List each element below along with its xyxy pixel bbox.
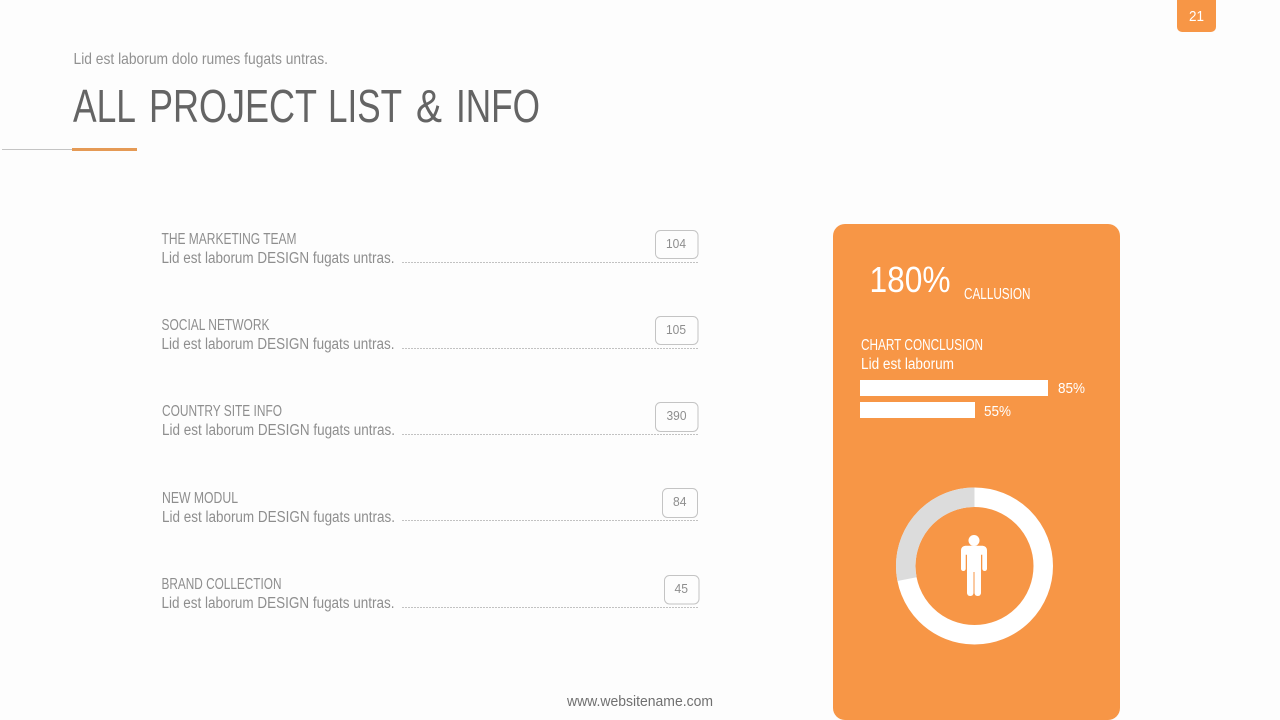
bar chart: 55% — [984, 403, 1011, 420]
title underline — [2, 148, 137, 151]
bar chart — [860, 380, 1085, 420]
donut chart — [906, 497, 1043, 635]
row: new modul: Lid est laborum DESIGN fugats untras. — [162, 509, 395, 526]
footer url: www.websitename.com — [566, 694, 713, 710]
title: INFO — [456, 80, 540, 132]
title: PROJECT — [149, 80, 317, 132]
page number tag: 21 — [1189, 8, 1204, 25]
row: country site info: 390 — [666, 408, 686, 423]
row: social network: SOCIAL NETWORK — [162, 317, 270, 334]
row: the marketing team: 104 — [666, 236, 686, 251]
row: country site info: Lid est laborum DESIGN fugats untras. — [162, 422, 395, 439]
page number tag — [1177, 0, 1216, 32]
row: social network: 105 — [666, 322, 686, 337]
row: brand collection: BRAND COLLECTION — [162, 576, 282, 593]
row: the marketing team — [162, 230, 699, 267]
row: brand collection: 45 — [674, 581, 688, 596]
row: new modul: 84 — [673, 494, 686, 509]
row: country site info: COUNTRY SITE INFO — [162, 403, 282, 420]
row: new modul: NEW MODUL — [162, 490, 238, 507]
title: LIST — [328, 80, 402, 132]
bar chart: 85% — [1058, 380, 1085, 397]
icon: person — [961, 535, 987, 596]
title — [73, 80, 540, 132]
panel: conclusion card — [833, 224, 1120, 720]
row: country site info — [162, 402, 699, 439]
title: & — [416, 80, 442, 132]
subtitle: Lid est laborum dolo rumes fugats untras. — [74, 51, 328, 68]
row: the marketing team: Lid est laborum DESIGN fugats untras. — [162, 250, 394, 267]
row: social network — [162, 316, 699, 353]
stat label: CALLUSION — [964, 286, 1030, 303]
row: brand collection — [162, 576, 699, 612]
title: ALL — [73, 80, 136, 132]
big stat: 180% — [870, 259, 950, 300]
project list — [162, 230, 699, 612]
row: brand collection: Lid est laborum DESIGN fugats untras. — [162, 595, 394, 612]
chart heading: CHART CONCLUSION — [861, 337, 983, 354]
row: the marketing team: THE MARKETING TEAM — [162, 231, 296, 248]
chart subheading: Lid est laborum — [861, 356, 954, 373]
row: social network: Lid est laborum DESIGN fugats untras. — [162, 336, 394, 353]
row: new modul — [162, 488, 699, 526]
